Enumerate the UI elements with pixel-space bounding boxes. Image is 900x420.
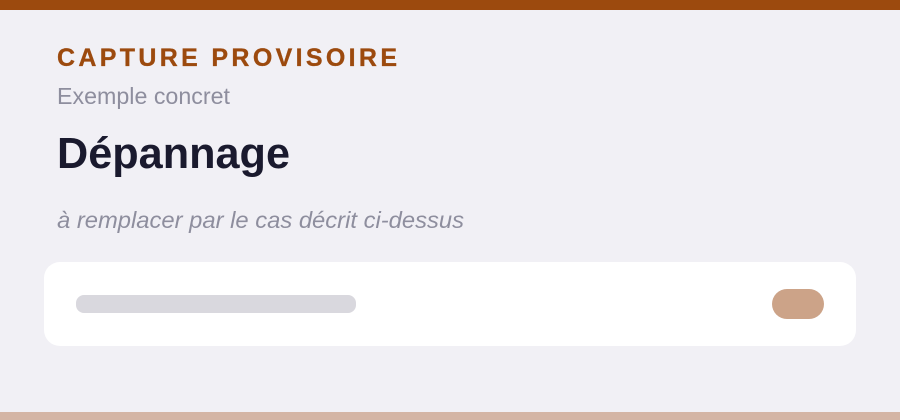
subtitle: Exemple concret (57, 83, 231, 109)
card (44, 262, 856, 346)
placeholder pill badge (772, 289, 824, 319)
eyebrow heading: CAPTURE PROVISOIRE (57, 44, 397, 72)
top accent bar (0, 0, 900, 10)
bottom accent bar (0, 412, 900, 420)
main title: Dépannage (57, 129, 290, 178)
card background (44, 262, 856, 346)
italic note: à remplacer par le cas décrit ci-dessus (57, 207, 465, 233)
placeholder text line (76, 295, 356, 313)
